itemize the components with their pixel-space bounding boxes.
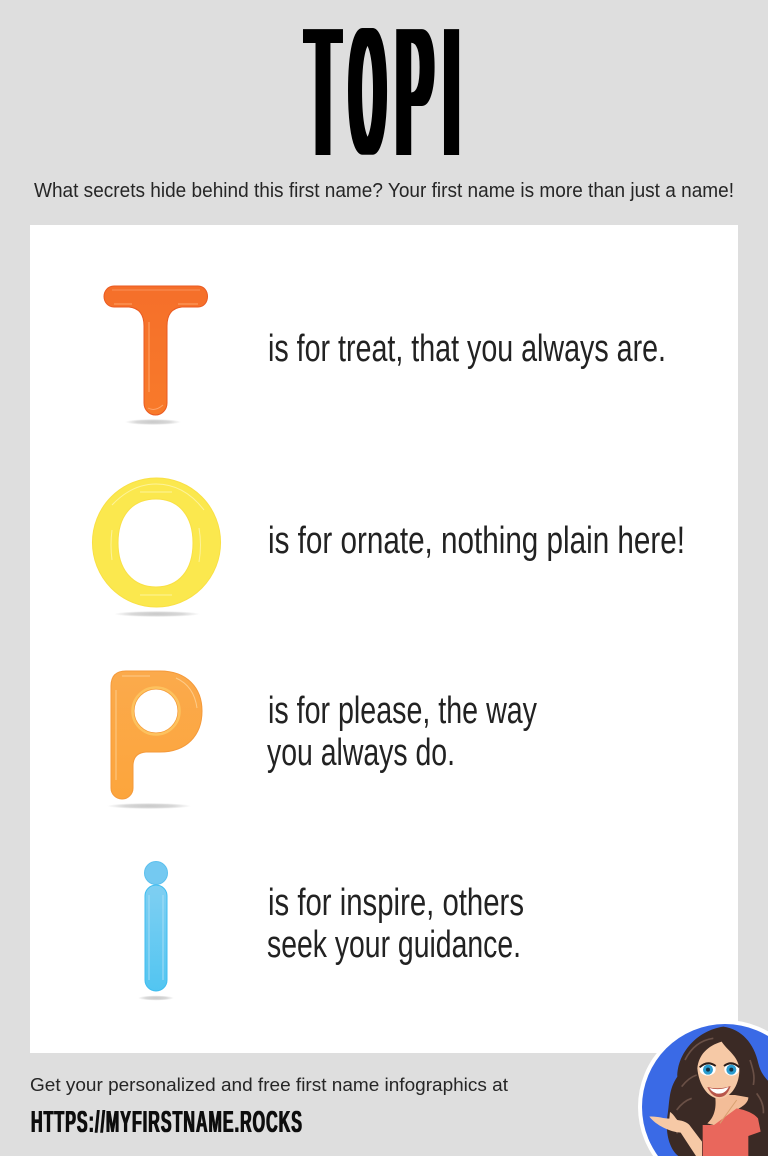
icon: letter i <box>138 862 174 1000</box>
text: I lines: is for inspire, others <box>268 882 524 924</box>
text: I lines <box>267 882 524 966</box>
icon: letter P <box>107 671 202 809</box>
row: letter I <box>138 862 524 1000</box>
footer text: Get your personalized and free first name infographics at <box>30 1074 508 1095</box>
text: P lines: is for please, the way <box>268 690 537 732</box>
row: letter O <box>92 478 685 617</box>
icon: letter O <box>92 478 221 617</box>
text: P lines: you always do. <box>267 732 455 774</box>
icon: letter T <box>104 286 208 425</box>
text: P lines <box>267 690 537 774</box>
panel: letters <box>30 225 738 1053</box>
footer url: HTTPS://MYFIRSTNAME.ROCKS <box>31 1105 303 1139</box>
text: I lines: seek your guidance. <box>267 924 521 966</box>
subtitle: What secrets hide behind this first name? Your first name is more than just a name! <box>34 180 734 202</box>
avatar badge <box>638 1020 768 1156</box>
row: letter T <box>104 286 666 425</box>
row: letter P <box>107 671 537 809</box>
